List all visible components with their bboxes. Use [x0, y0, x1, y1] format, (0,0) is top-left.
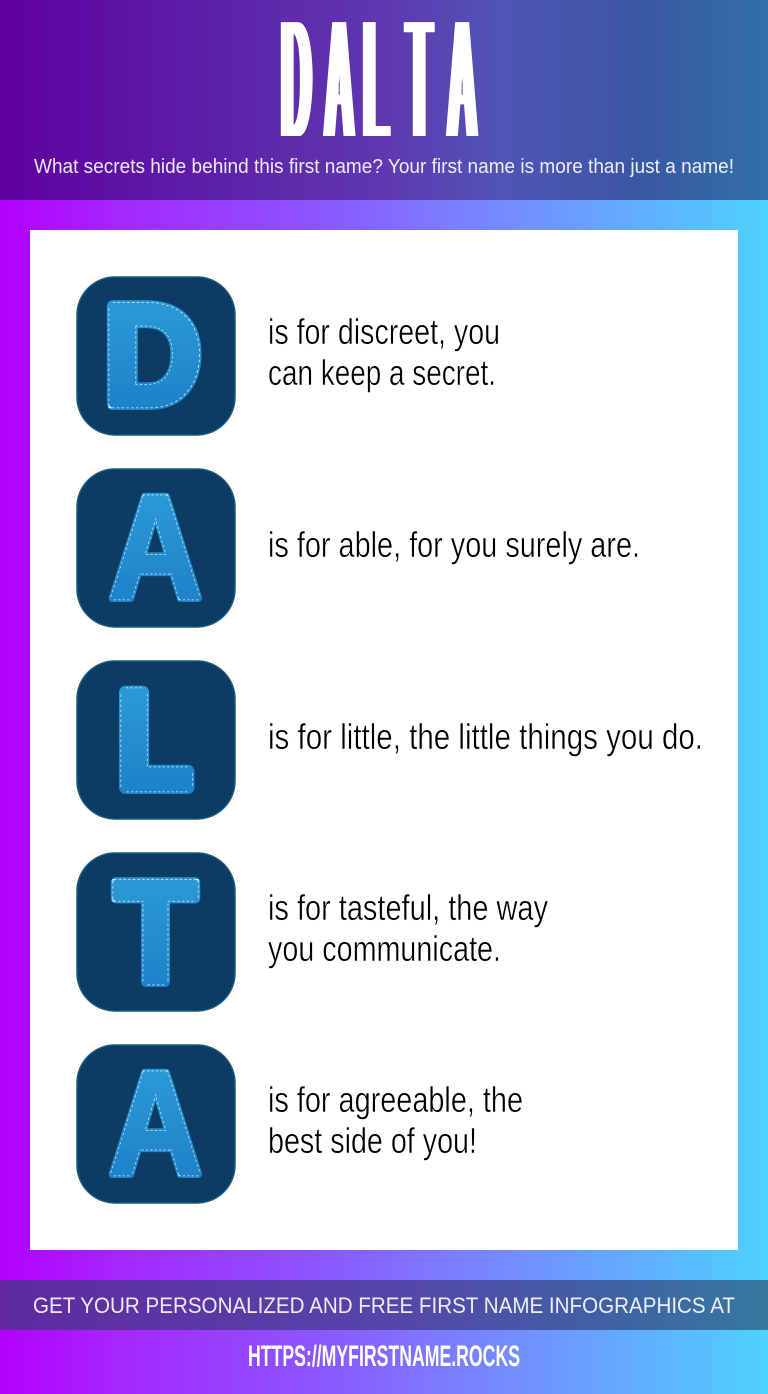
icon: letter T: T — [114, 851, 197, 1013]
icon: letter L: L — [117, 664, 192, 817]
icon: letter T: T — [114, 851, 197, 1013]
icon: letter A: A — [109, 466, 202, 630]
icon: letter A second: A — [109, 1042, 202, 1206]
icon: letter D: D — [104, 276, 202, 435]
header band — [0, 0, 768, 200]
text: A meaning: is for able, for you surely are. — [268, 524, 640, 565]
row: T — [77, 851, 548, 1013]
footer url: HTTPS://MYFIRSTNAME.ROCKS — [248, 1340, 520, 1373]
text: D meaning — [268, 311, 500, 393]
text: D meaning: is for discreet, you — [268, 311, 500, 352]
text: T meaning: you communicate. — [268, 928, 501, 969]
icon: letter A: A — [109, 466, 202, 630]
icon: letter A — [77, 466, 235, 630]
text: A second meaning — [268, 1079, 523, 1161]
subtitle: What secrets hide behind this first name? Your first name is more than just a name! — [34, 156, 734, 178]
icon: letter L: L — [117, 664, 192, 817]
icon: letter A: A — [109, 466, 202, 630]
text: T meaning: is for tasteful, the way — [268, 887, 548, 928]
panel: white letter list — [30, 230, 738, 1250]
icon: letter L: L — [117, 664, 192, 817]
row: A — [77, 466, 640, 630]
row: L — [77, 661, 703, 819]
icon: letter L — [77, 661, 235, 819]
icon: letter A second: A — [109, 1042, 202, 1206]
row: A second — [77, 1042, 523, 1206]
text: A second meaning: is for agreeable, the — [268, 1079, 523, 1120]
footer call to action: GET YOUR PERSONALIZED AND FREE FIRST NAME INFOGRAPHICS AT — [33, 1293, 735, 1318]
icon: letter T: T — [114, 851, 197, 1013]
icon: letter D: D — [104, 276, 202, 435]
text: T meaning — [268, 887, 548, 969]
row: D — [77, 276, 500, 435]
icon: letter A second: A — [109, 1042, 202, 1206]
footer band — [0, 1280, 768, 1330]
icon: letter D — [77, 276, 235, 435]
text: D meaning: can keep a secret. — [268, 352, 496, 393]
text: A second meaning: best side of you! — [268, 1120, 477, 1161]
icon: letter D: D — [104, 276, 202, 435]
icon: letter T — [77, 851, 235, 1013]
icon: letter A second — [77, 1042, 235, 1206]
